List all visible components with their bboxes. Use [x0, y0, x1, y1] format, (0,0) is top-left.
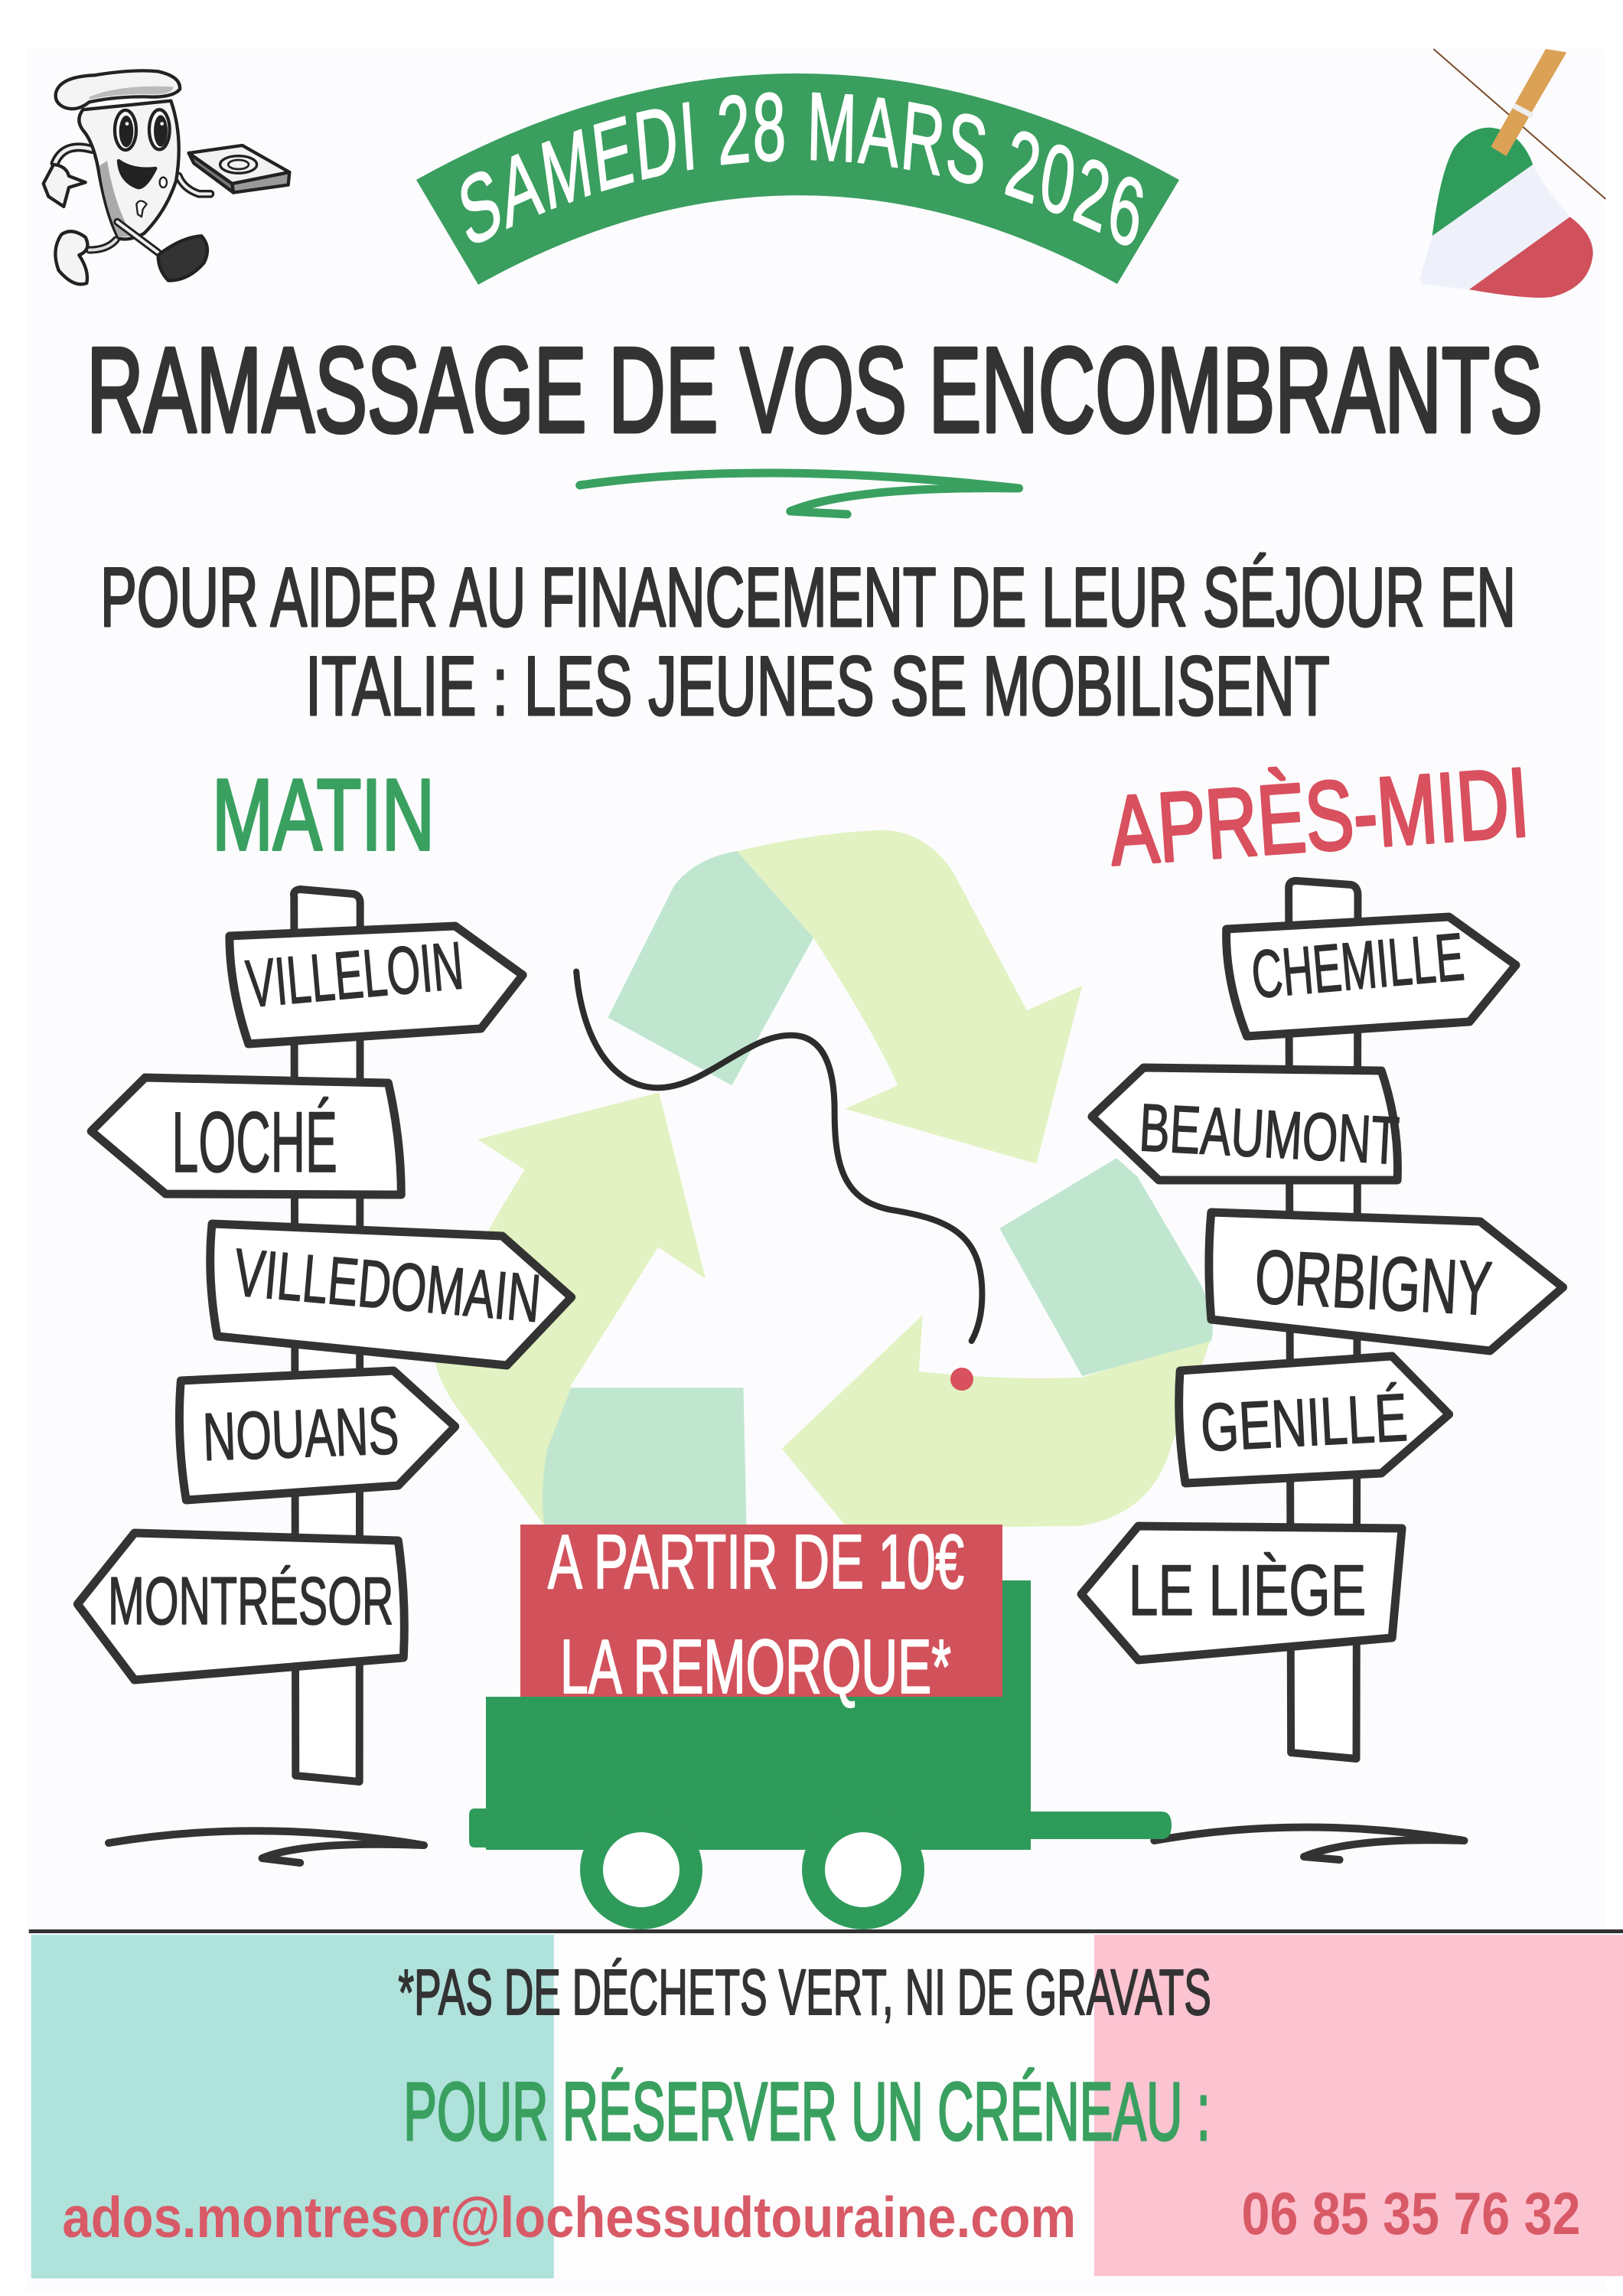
wheel right	[802, 1810, 924, 1929]
red stripe	[1094, 1935, 1623, 2276]
date banner	[416, 73, 1179, 285]
left signpost: morning villages	[77, 889, 572, 1782]
green stripe	[31, 1935, 554, 2278]
footer Italian flag panel	[29, 1929, 1623, 2278]
arrow right	[782, 1315, 1211, 1528]
arrow left mint band	[543, 1388, 747, 1528]
sign: Nouans: NOUANS	[201, 1393, 400, 1475]
sign: Villedomain	[210, 1224, 572, 1365]
right signpost: afternoon villages	[1081, 881, 1563, 1759]
sign: Orbigny: ORBIGNY	[1253, 1234, 1494, 1332]
sign: Villeloin: VILLELOIN	[243, 928, 466, 1022]
sign: Orbigny	[1209, 1212, 1563, 1351]
arrow top	[737, 830, 1082, 1164]
sign: Nouans	[179, 1371, 455, 1500]
subtitle	[100, 551, 1516, 733]
sign: Genillé	[1179, 1356, 1449, 1483]
post	[1289, 881, 1357, 1759]
price line 1: A PARTIR DE 10€	[548, 1519, 964, 1605]
wheel hole left	[603, 1832, 680, 1907]
sign: Beaumont	[1092, 1068, 1401, 1180]
sign: Montrésor	[77, 1533, 404, 1680]
arrow top mint band	[608, 851, 813, 1085]
heading: morning: MATIN	[212, 758, 435, 871]
trailer body	[469, 1697, 1172, 1850]
post	[294, 889, 360, 1782]
sign: Le Liège: LE LIÈGE	[1129, 1550, 1366, 1630]
sign: Beaumont: BEAUMONT	[1138, 1090, 1401, 1179]
banner arch	[416, 73, 1179, 285]
arrow left	[434, 1092, 706, 1526]
wheel left	[580, 1810, 702, 1929]
trailer with price	[469, 1519, 1172, 1929]
sign: Chemille: CHEMILLE	[1249, 919, 1467, 1013]
white stripe	[554, 1935, 1094, 2278]
email: ados.montresor@lochessudtouraine.com	[62, 2185, 1076, 2249]
sign: Le Liège	[1081, 1526, 1402, 1660]
red load	[520, 1525, 1002, 1697]
sign: Villeloin	[230, 926, 523, 1044]
footer rule	[29, 1929, 1623, 1933]
recycling symbol	[434, 830, 1213, 1528]
route end dot	[950, 1368, 973, 1391]
arrow right mint band	[999, 1158, 1213, 1376]
banner date text: SAMEDI 28 MARS 2026	[461, 92, 1143, 246]
ground swoosh left	[109, 1831, 424, 1863]
sign: Loché: LOCHÉ	[171, 1094, 337, 1190]
sign: Genillé: GENILLÉ	[1199, 1380, 1410, 1466]
price box	[520, 1519, 1002, 1710]
icon: running pizza mascot	[44, 70, 289, 284]
wheel hole right	[825, 1832, 901, 1907]
ground swoosh right	[1154, 1828, 1465, 1860]
icon: Italian flag trowel on clothesline	[1420, 49, 1605, 298]
sign: Montrésor: MONTRÉSOR	[108, 1564, 393, 1639]
winding route line	[576, 971, 982, 1341]
sign: Villedomain: VILLEDOMAIN	[231, 1234, 543, 1336]
trailer tailboard	[1002, 1580, 1031, 1699]
sign: Loché	[91, 1078, 401, 1195]
green swoosh arrow	[580, 473, 1019, 514]
sign: Chemille	[1227, 917, 1516, 1036]
price line 2: LA REMORQUE*	[560, 1624, 951, 1710]
